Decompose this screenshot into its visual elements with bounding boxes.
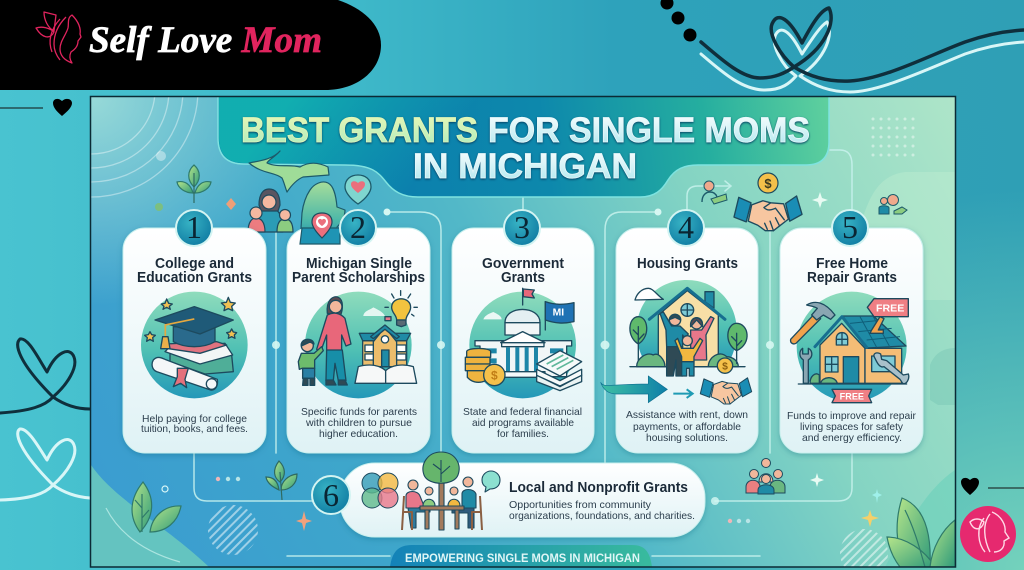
heading: College and (155, 256, 234, 272)
icon: house with tools: FREE (876, 304, 904, 315)
title banner (218, 90, 829, 197)
heading: Housing Grants (637, 256, 738, 272)
heading (138, 257, 252, 282)
heading: Free Home (816, 256, 888, 272)
description (787, 410, 916, 444)
icon: sprout top-left (177, 165, 211, 203)
icon: map pin (312, 213, 332, 238)
icon: house with tools (791, 292, 909, 403)
icon: sprig (266, 461, 297, 500)
icon: venn circles (362, 473, 398, 508)
description: Funds to improve and repair (787, 410, 916, 422)
icon: logo mother and butterfly (36, 12, 81, 63)
number badge 2 (340, 209, 376, 246)
icon: handshake and coin: $ (764, 176, 772, 191)
icon: heart pin (345, 175, 371, 204)
description (301, 406, 417, 440)
icon: orange sparkle (296, 511, 312, 531)
logo badge: pink circle (960, 506, 1016, 562)
description: higher education. (319, 428, 398, 440)
heading: Education Grants (137, 270, 252, 286)
icon: leaves bottom-left (132, 482, 181, 532)
decorative: left heart loops (0, 339, 90, 500)
icon: people at table under tree (402, 452, 500, 530)
description: Specific funds for parents (301, 406, 417, 418)
icon: sparkle (812, 192, 828, 208)
icon: family at house: $ (722, 362, 728, 373)
footer banner: EMPOWERING SINGLE MOMS IN MICHIGAN (405, 551, 640, 565)
icon: sparkles (810, 473, 882, 527)
header: black logo bar (0, 0, 381, 90)
number badge 4: 4 (678, 209, 694, 245)
icon: capitol, coins, papers (465, 288, 582, 398)
icon: capitol, coins, papers: MI (553, 308, 564, 319)
heading: Michigan Single (306, 256, 412, 272)
decorative blobs (91, 172, 955, 570)
number badge 1 (176, 209, 212, 246)
description (626, 409, 748, 444)
number badge 6 (312, 476, 350, 514)
description: Help paying for college (142, 413, 247, 425)
heading (482, 258, 564, 282)
decorative dot grid top-right (872, 118, 914, 156)
number badge 1: 1 (186, 209, 202, 245)
description: organizations, foundations, and charities. (509, 510, 695, 522)
heading: Local and Nonprofit Grants (509, 480, 688, 496)
description: State and federal financial (463, 406, 582, 418)
icon: mother and children (248, 189, 293, 232)
logo wordmark: Self Love Mom (89, 20, 322, 61)
description (509, 499, 695, 522)
footer banner (390, 545, 652, 567)
decorative: right small heart and line (961, 478, 1024, 495)
lower peninsula overlap (300, 228, 340, 244)
description: housing solutions. (646, 432, 728, 444)
panel: card 4 (601, 209, 758, 453)
decorative dots (155, 198, 236, 211)
connector lines (194, 150, 852, 556)
title text: BEST GRANTS (241, 111, 478, 150)
description: with children to pursue (305, 417, 412, 429)
heading (808, 258, 896, 285)
icon: people with money right (879, 194, 907, 214)
heading: Parent Scholarships (292, 270, 425, 286)
title text (241, 116, 810, 181)
panel: card 1 (123, 209, 266, 453)
description: and energy efficiency. (802, 432, 902, 444)
icon: leaves bottom-right (887, 498, 955, 567)
icon: parent with child, school and book (298, 291, 417, 398)
description (141, 414, 247, 434)
number badge 3: 3 (514, 209, 530, 245)
number badge 5: 5 (842, 209, 858, 245)
description: payments, or affordable (633, 421, 741, 433)
panel frame (90, 96, 956, 567)
decorative: left small heart and line (0, 99, 72, 116)
icon: house with tools: FREE (840, 391, 864, 401)
heading: Government (482, 256, 564, 272)
title text: IN MICHIGAN (413, 147, 637, 186)
main infographic panel (91, 97, 955, 566)
heading: Repair Grants (807, 270, 897, 286)
panel: local and nonprofit grants (312, 452, 705, 537)
number badge 2: 2 (350, 209, 366, 245)
heading: Grants (501, 270, 545, 286)
icon: community group (746, 458, 785, 494)
number badge 6: 6 (323, 477, 339, 513)
decorative dots (216, 477, 750, 523)
title text: FOR SINGLE MOMS (488, 111, 810, 150)
description: living spaces for safety (800, 421, 904, 433)
description: Assistance with rent, down (626, 409, 748, 421)
panel: card 3 (452, 209, 594, 453)
icon: capitol, coins, papers: $ (491, 368, 498, 382)
decorative swirl: top right heart (660, 0, 1024, 92)
heading (292, 256, 425, 286)
number badge 4 (668, 209, 704, 246)
number badge 5 (832, 209, 868, 246)
panel: card 5 (780, 209, 923, 453)
panel: card 2 (287, 209, 430, 453)
decorative arcs top-left (91, 97, 198, 198)
description: for families. (497, 428, 549, 440)
description: Opportunities from community (509, 499, 652, 511)
icon: family at house (601, 280, 752, 404)
description (464, 408, 582, 437)
number badge 3 (504, 209, 540, 246)
description: tuition, books, and fees. (141, 423, 248, 435)
description: aid programs available (472, 417, 574, 429)
icon: graduation cap, books, diploma (141, 292, 248, 398)
icon: person with money (702, 181, 727, 204)
connector nodes (272, 208, 774, 505)
icon: handshake and coin (734, 173, 802, 231)
icon: Michigan map (248, 150, 346, 230)
